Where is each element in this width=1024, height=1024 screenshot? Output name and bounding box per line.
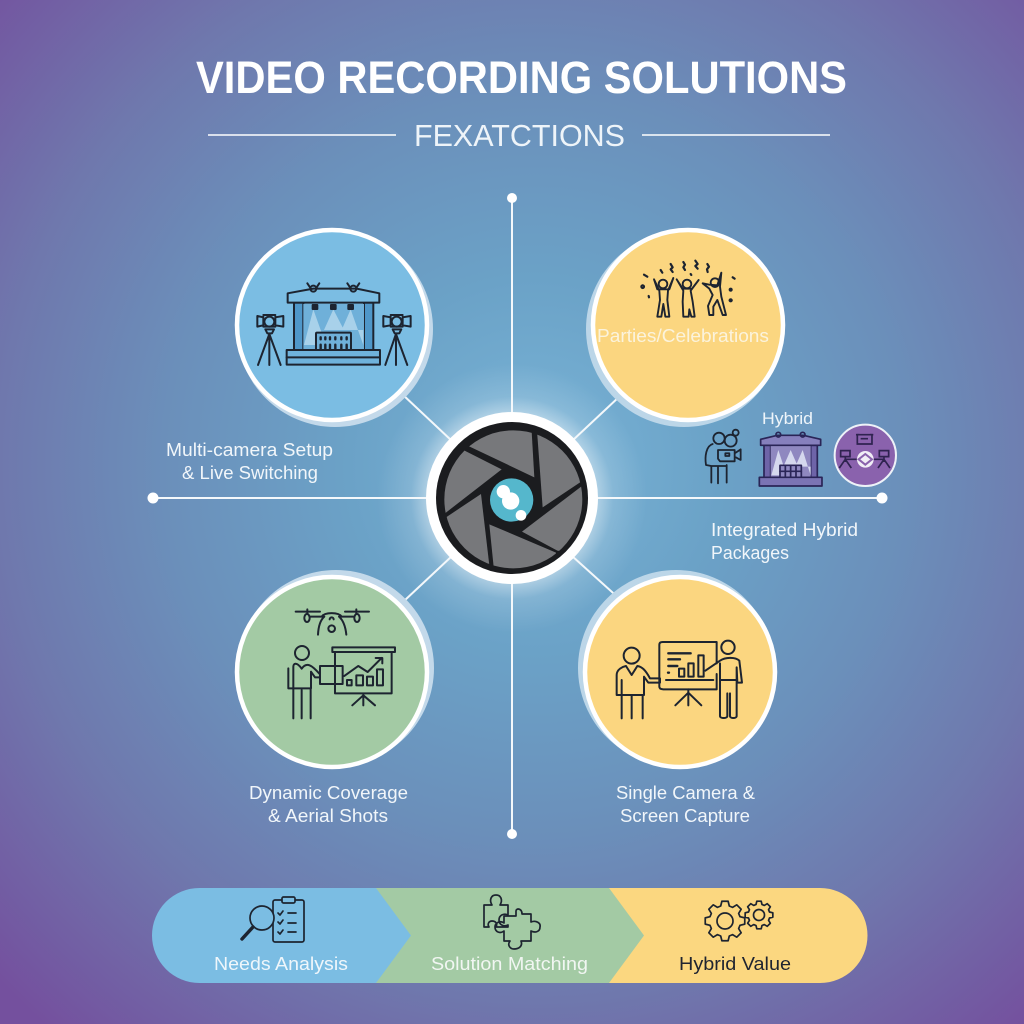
subtitle with side rules: FEXATCTIONS <box>414 118 625 153</box>
panel: parties and celebrations circle <box>586 230 783 427</box>
icon: stage with two cameras <box>257 283 411 365</box>
label: hybrid: Hybrid <box>762 409 813 428</box>
title: VIDEO RECORDING SOLUTIONS <box>196 52 847 103</box>
label: dynamic coverage <box>249 783 408 826</box>
panel: dynamic coverage circle <box>237 570 434 767</box>
icon: drone and presenter with chart <box>288 609 395 718</box>
panel: multi-camera setup circle <box>237 230 433 427</box>
label: parties/celebrations: Parties/Celebrations <box>597 326 769 346</box>
label: integrated hybrid packages: Packages <box>711 543 789 563</box>
label: single camera and screen capture: Screen Capture <box>620 806 750 826</box>
label: multi-camera setup: & Live Switching <box>182 463 318 483</box>
hybrid mini group <box>706 409 896 486</box>
step: needs analysis: Needs Analysis <box>214 954 348 974</box>
icon: two presenters with screen <box>617 641 742 718</box>
label: single camera and screen capture <box>616 783 755 826</box>
label: integrated hybrid packages: Integrated Hybrid <box>711 520 858 540</box>
icon: camera operator <box>706 430 741 483</box>
step: solution matching <box>376 888 644 983</box>
label: dynamic coverage: & Aerial Shots <box>268 806 388 826</box>
icon: dancing people with music notes <box>641 261 735 317</box>
label: dynamic coverage: Dynamic Coverage <box>249 783 408 803</box>
label: single camera and screen capture: Single Camera & <box>616 783 755 803</box>
icon: purple stage <box>759 432 822 486</box>
lens iris <box>490 478 533 522</box>
label: multi-camera setup <box>166 440 333 483</box>
center camera aperture <box>426 412 598 584</box>
icon: purple circle with cameras <box>835 425 896 486</box>
panel: single camera circle <box>578 570 775 767</box>
label: integrated hybrid packages <box>711 520 858 563</box>
process bar <box>152 888 868 983</box>
step: hybrid value: Hybrid Value <box>679 954 791 974</box>
label: multi-camera setup: Multi-camera Setup <box>166 440 333 460</box>
step: needs analysis <box>152 888 411 983</box>
step: hybrid value <box>590 888 868 983</box>
step: solution matching: Solution Matching <box>431 954 588 974</box>
aperture blades <box>444 430 582 568</box>
connector axes and spokes <box>148 193 888 839</box>
